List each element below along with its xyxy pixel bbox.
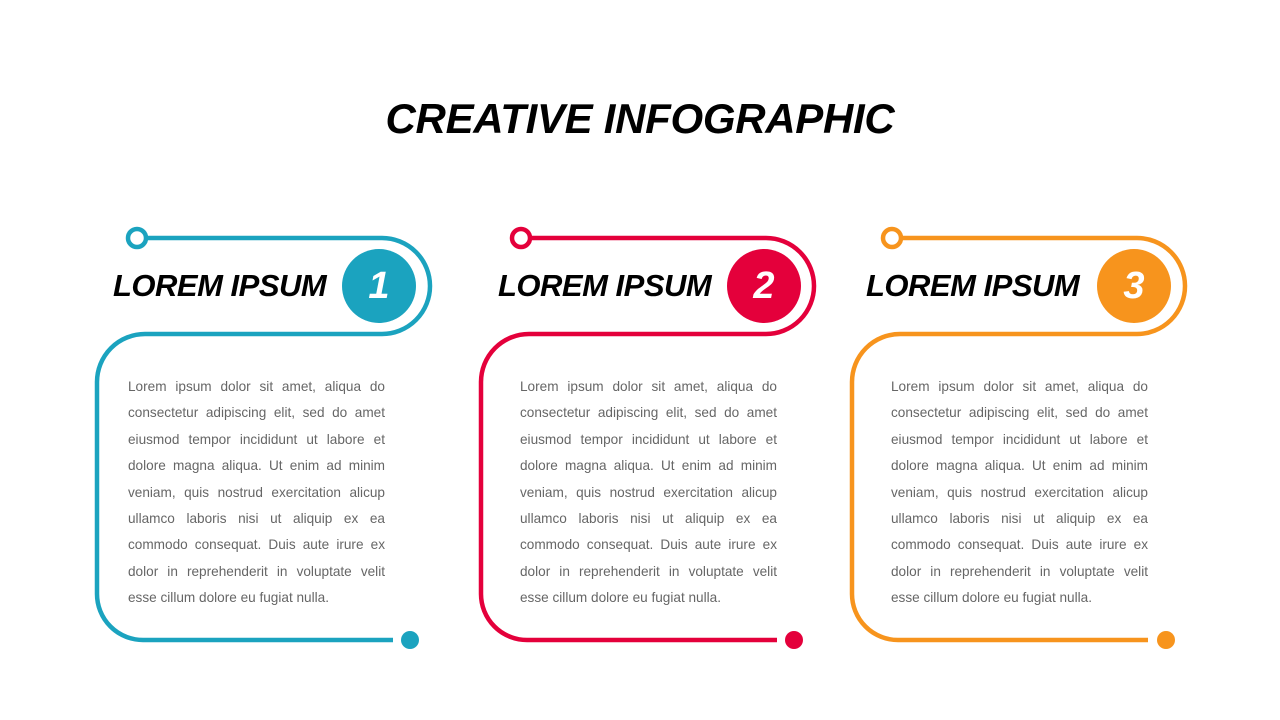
- number badge 1: [342, 249, 416, 323]
- number badge 2: [727, 249, 801, 323]
- text 1: Lorem ipsum dolor sit amet, aliqua do consectetur adipiscing elit, sed do amet eiusmod tempor incididunt ut labore et dolore magna aliqua. Ut enim ad minim veniam, quis nostrud exercitation alicup ullamco laboris nisi ut aliquip ex ea commodo consequat. Duis aute irure ex dolor in reprehenderit in voluptate velit esse cillum dolore eu fugiat nulla.: [128, 379, 385, 605]
- outline 1: [94, 226, 432, 649]
- panel: item 2: [478, 226, 816, 649]
- number badge 3: 3: [1123, 265, 1145, 307]
- panel: item 1: [94, 226, 432, 649]
- number badge 2: 2: [753, 265, 775, 307]
- heading 1: LOREM IPSUM: [113, 268, 326, 303]
- outline 3: [850, 226, 1188, 649]
- title: CREATIVE INFOGRAPHIC: [386, 95, 894, 142]
- text 2: Lorem ipsum dolor sit amet, aliqua do consectetur adipiscing elit, sed do amet eiusmod tempor incididunt ut labore et dolore magna aliqua. Ut enim ad minim veniam, quis nostrud exercitation alicup ullamco laboris nisi ut aliquip ex ea commodo consequat. Duis aute irure ex dolor in reprehenderit in voluptate velit esse cillum dolore eu fugiat nulla.: [520, 379, 777, 605]
- number badge 3: [1097, 249, 1171, 323]
- outline 2: [478, 226, 816, 649]
- panel: item 3: [850, 226, 1188, 649]
- heading 2: LOREM IPSUM: [498, 268, 711, 303]
- text 3: Lorem ipsum dolor sit amet, aliqua do consectetur adipiscing elit, sed do amet eiusmod tempor incididunt ut labore et dolore magna aliqua. Ut enim ad minim veniam, quis nostrud exercitation alicup ullamco laboris nisi ut aliquip ex ea commodo consequat. Duis aute irure ex dolor in reprehenderit in voluptate velit esse cillum dolore eu fugiat nulla.: [891, 379, 1148, 605]
- number badge 1: 1: [368, 265, 390, 307]
- heading 3: LOREM IPSUM: [866, 268, 1079, 303]
